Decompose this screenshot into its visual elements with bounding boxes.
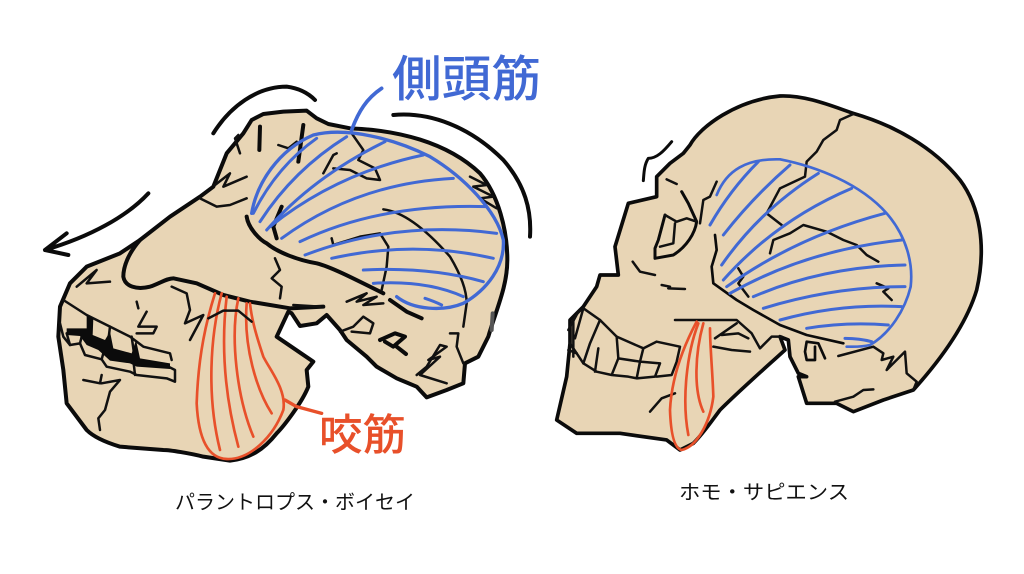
masseter muscle (orange) [197, 293, 322, 459]
temporalis muscle (blue) [710, 159, 911, 347]
eye socket [655, 179, 697, 258]
leader line to temporalis [352, 88, 382, 130]
teeth [568, 308, 680, 378]
skull outline [58, 111, 507, 461]
skull outline [557, 96, 981, 450]
temporalis muscle (blue) [252, 132, 503, 308]
teeth [60, 300, 175, 382]
skull: Homo sapiens [557, 96, 981, 450]
label: masseter: 咬筋 [319, 412, 406, 460]
brow arc [643, 142, 672, 181]
caption: Paranthropus boisei: パラントロプス・ボイセイ [175, 491, 415, 514]
masseter muscle (orange) [670, 322, 713, 450]
caption: Homo sapiens: ホモ・サピエンス [679, 482, 849, 504]
temporal line and sutures [633, 114, 917, 412]
label: temporalis: 側頭筋 [392, 53, 541, 107]
arrow pointing forward [45, 193, 148, 255]
brow and cheek contour lines [77, 125, 497, 430]
jaw joint lines [675, 320, 782, 352]
skull: Paranthropus boisei [45, 87, 530, 461]
rear arc [393, 115, 530, 237]
brow arc [213, 87, 315, 133]
